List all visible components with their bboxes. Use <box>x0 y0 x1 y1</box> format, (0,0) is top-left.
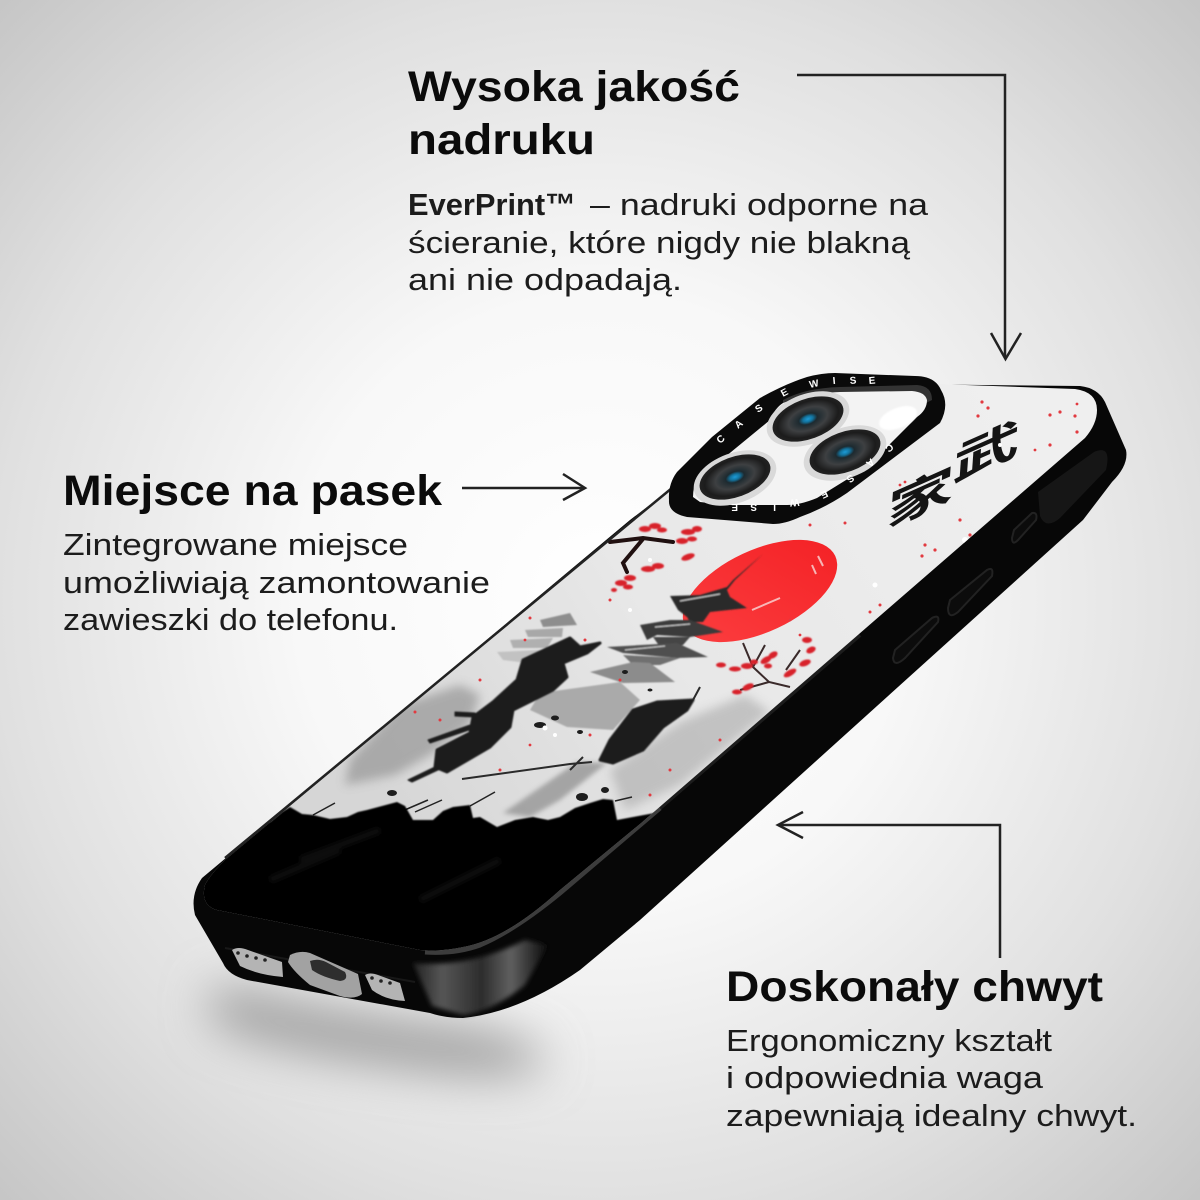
right mist <box>610 695 770 810</box>
heading: print quality <box>408 63 740 164</box>
red splatter <box>414 400 1079 796</box>
phone shadow <box>210 985 548 1074</box>
robe trail <box>503 762 607 817</box>
main pagoda <box>530 554 763 730</box>
text: print quality description: ścieranie, które nigdy nie blakną <box>408 225 911 260</box>
back pagoda <box>497 613 577 663</box>
rim upper <box>660 635 860 808</box>
camera bump <box>669 373 945 524</box>
arrow: strap place <box>462 474 585 500</box>
blossoms top <box>611 523 702 592</box>
ground texture <box>270 830 500 900</box>
heading: grip: Doskonały chwyt <box>726 963 1103 1011</box>
white flecks <box>542 443 1002 737</box>
arrow: print quality <box>797 75 1021 359</box>
glass window <box>693 391 927 505</box>
calligraphy <box>889 421 1018 527</box>
text: print quality description: EverPrint™ <box>408 187 576 222</box>
blossoms right <box>716 637 817 694</box>
text: grip description <box>726 1023 1137 1133</box>
strap slot <box>1038 450 1108 524</box>
lens right <box>796 415 894 491</box>
large samurai <box>408 638 600 782</box>
calligraphy: 武 <box>951 402 1022 495</box>
ink spikes <box>313 792 632 815</box>
bump ring <box>669 373 945 524</box>
cherry branch top <box>610 538 673 572</box>
black ink splatter <box>387 670 652 801</box>
text: grip description: Ergonomiczny kształt <box>726 1023 1052 1058</box>
corner highlight <box>413 940 548 1015</box>
action button <box>1012 513 1036 543</box>
heading: print quality: nadruku <box>408 116 595 164</box>
case body <box>194 383 1126 1018</box>
red sun <box>682 540 838 642</box>
left mist <box>345 685 480 785</box>
sun white brush strokes <box>752 556 823 610</box>
arrow: grip <box>778 812 1000 958</box>
heading: print quality: Wysoka jakość <box>408 63 740 111</box>
USB-C port <box>288 952 362 998</box>
black ground ink <box>204 798 654 951</box>
lens left <box>686 440 784 516</box>
swords <box>462 687 700 779</box>
rim highlight <box>425 808 660 952</box>
brand text lower: CASEWISE <box>731 441 895 512</box>
side buttons <box>893 513 1036 663</box>
right speaker <box>365 974 405 1001</box>
running samurai <box>462 687 700 817</box>
text: print quality description: – nadruki odporne na <box>590 187 929 222</box>
artwork base <box>190 370 1110 970</box>
cherry branch right <box>740 643 800 690</box>
text: strap place description: Zintegrowane miejsce <box>63 527 408 562</box>
text: strap place description: zawieszki do telefonu. <box>63 602 398 637</box>
phone case <box>194 383 1126 1018</box>
ring top sheen <box>783 385 932 405</box>
printed artwork <box>190 370 1110 980</box>
left speaker <box>232 948 283 977</box>
text: print quality description <box>408 187 929 297</box>
text: strap place description: umożliwiają zamontowanie <box>63 565 490 600</box>
text: print quality description: ani nie odpadają. <box>408 262 682 297</box>
text: strap place description <box>63 527 490 637</box>
flash <box>876 401 920 435</box>
heading: strap place: Miejsce na pasek <box>63 467 442 515</box>
text: grip description: zapewniają idealny chwyt. <box>726 1098 1137 1133</box>
plate rim left <box>225 488 672 858</box>
text: grip description: i odpowiednia waga <box>726 1060 1044 1095</box>
lens top <box>759 381 857 457</box>
volume up <box>948 569 992 615</box>
roof stripes <box>625 594 720 650</box>
side seam line <box>225 948 415 982</box>
calligraphy: 家 <box>885 448 956 541</box>
brand text upper: CASEWISE <box>715 375 876 446</box>
volume down <box>893 617 938 663</box>
